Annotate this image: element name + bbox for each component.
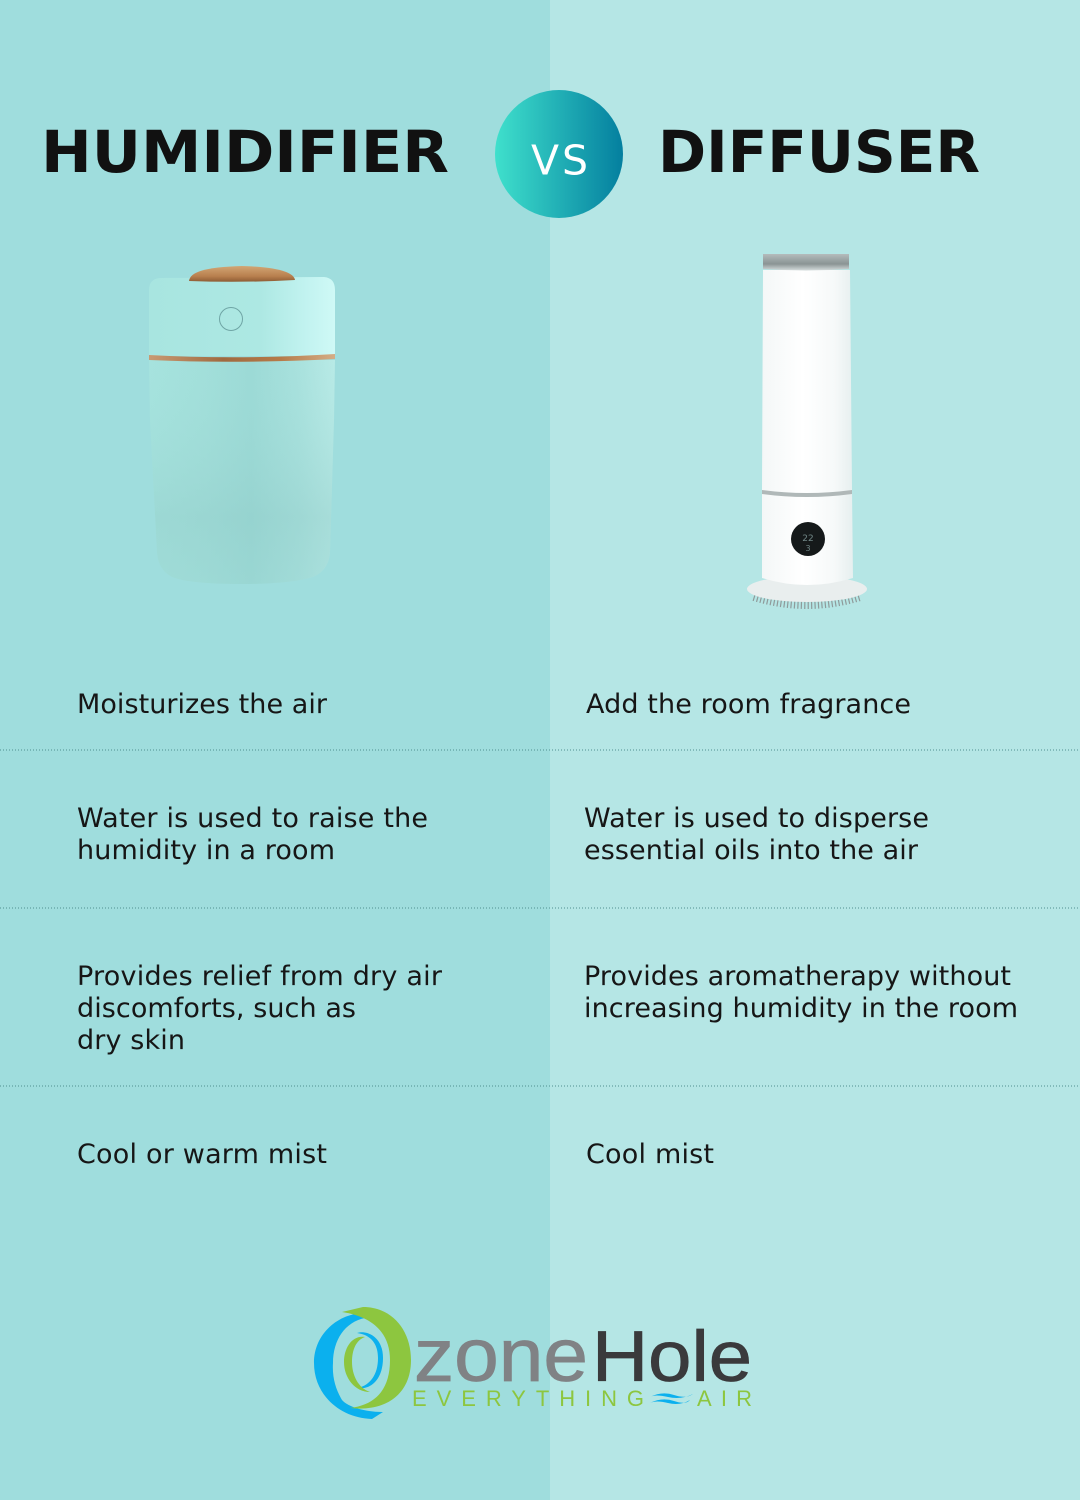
text: diffuser row 4: Cool mist — [586, 1139, 714, 1170]
divider lines — [0, 750, 1080, 1086]
illustration: diffuser — [747, 254, 867, 604]
illustration: diffuser: 22 — [802, 534, 814, 544]
heading: diffuser: DIFFUSER — [658, 118, 980, 186]
text: humidifier row 2: humidity in a room — [77, 835, 335, 866]
badge: vs: VS — [531, 136, 588, 184]
panel: diffuser background — [550, 0, 1080, 1500]
tagline: AIR — [697, 1386, 752, 1411]
illustration: humidifier — [149, 266, 335, 584]
badge: vs — [495, 90, 623, 218]
text: diffuser row 2: Water is used to disperse — [584, 803, 929, 834]
text: diffuser row 3: increasing humidity in the room — [584, 993, 1018, 1024]
text: diffuser row 3: Provides aromatherapy without — [584, 961, 1011, 992]
text: diffuser row 2: essential oils into the air — [584, 835, 919, 866]
text: diffuser row 2 — [584, 803, 929, 866]
text: humidifier row 3 — [77, 961, 443, 1056]
text: diffuser row 1: Add the room fragrance — [586, 689, 911, 720]
illustration: diffuser: 3 — [805, 544, 811, 553]
panel: humidifier background — [0, 0, 550, 1500]
heading: humidifier: HUMIDIFIER — [41, 118, 449, 186]
text: humidifier row 4: Cool or warm mist — [77, 1139, 327, 1170]
tagline — [412, 1386, 752, 1411]
wordmark — [414, 1313, 752, 1397]
wordmark: zone — [414, 1313, 588, 1397]
text: humidifier row 3: discomforts, such as — [77, 993, 356, 1024]
text: humidifier row 1: Moisturizes the air — [77, 689, 328, 720]
icon: ozone rings — [314, 1307, 411, 1419]
text: humidifier row 2: Water is used to raise the — [77, 803, 428, 834]
tagline: EVERYTHING — [412, 1386, 644, 1411]
wordmark: Hole — [592, 1318, 752, 1397]
text: humidifier row 2 — [77, 803, 428, 866]
text: diffuser row 3 — [584, 961, 1018, 1024]
text: humidifier row 3: Provides relief from dry air — [77, 961, 443, 992]
logo: OzoneHole — [314, 1307, 752, 1419]
text: humidifier row 3: dry skin — [77, 1025, 185, 1056]
